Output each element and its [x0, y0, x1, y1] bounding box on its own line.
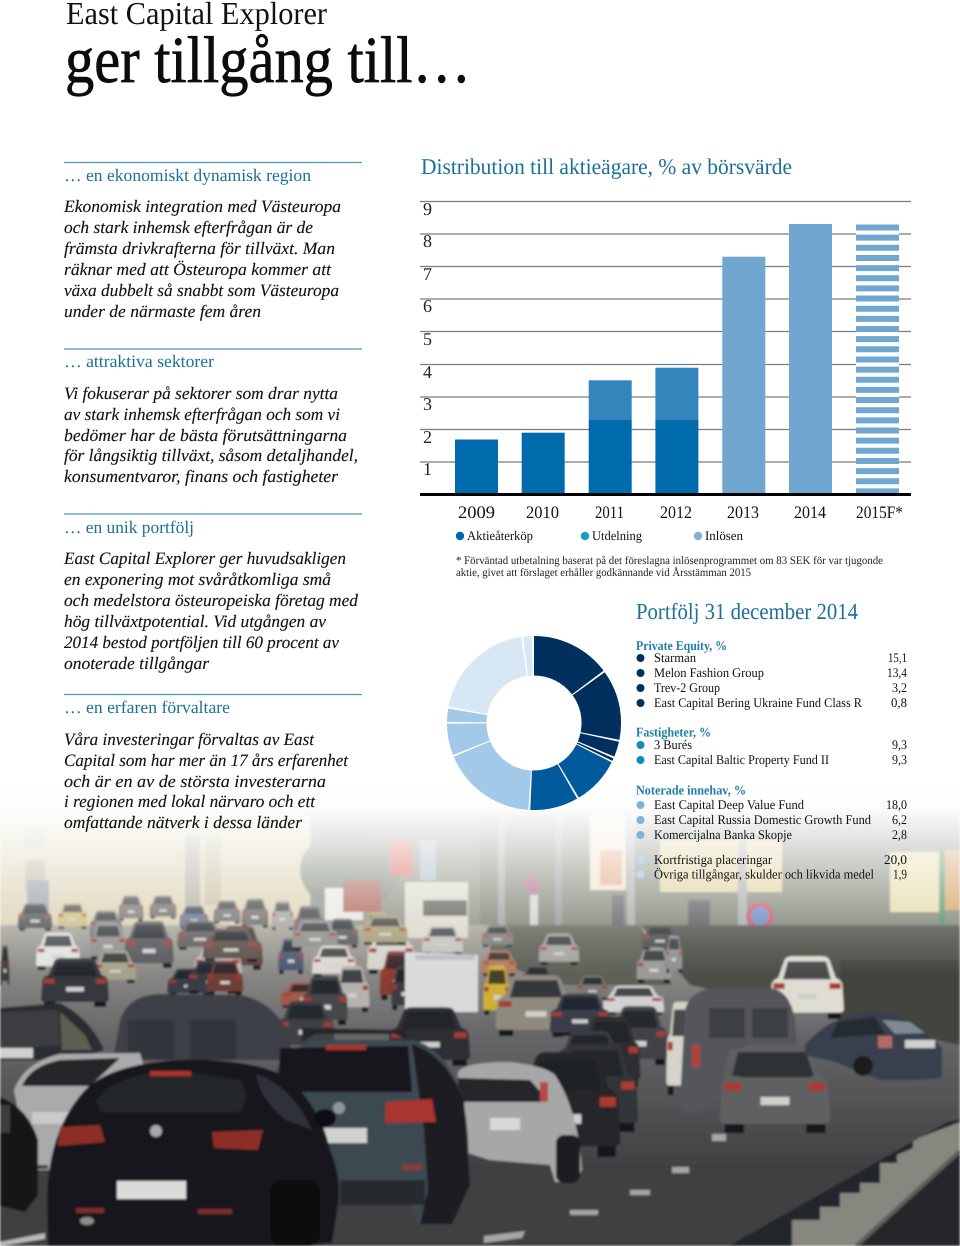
table: private equity: Trev-2 Group — [654, 680, 720, 695]
panel: en ekonomiskt dynamisk region: främsta drivkrafterna för tillväxt. Man — [64, 238, 335, 258]
panel: en ekonomiskt dynamisk region: … en ekonomiskt dynamisk region — [64, 165, 311, 185]
title — [65, 0, 471, 97]
x axis years: 2009 — [458, 502, 495, 522]
table: private equity: Private Equity, % — [636, 638, 727, 653]
panel: en unik portfölj: … en unik portfölj — [64, 517, 194, 537]
legend: distribution: Aktieåterköp — [467, 528, 533, 543]
bar 2009 — [455, 440, 498, 494]
bar 2012 — [655, 368, 698, 495]
legend: distribution: Inlösen — [705, 528, 743, 543]
footnote: * Förväntad utbetalning baserat på det föreslagna inlösenprogrammet om 83 SEK för var tjugonde — [456, 555, 883, 567]
x axis years: 2013 — [727, 502, 759, 522]
panel: en erfaren förvaltare: i regionen med lokal närvaro och ett — [64, 791, 316, 811]
panel: en ekonomiskt dynamisk region: Ekonomisk integration med Västeuropa — [63, 196, 341, 216]
panel: attraktiva sektorer: för långsiktig tillväxt, såsom detaljhandel, — [64, 445, 358, 465]
table: other holdings: Övriga tillgångar, skulder och likvida medel — [654, 866, 874, 882]
panel: en erfaren förvaltare: omfattande nätverk i dessa länder — [64, 812, 302, 832]
bar 2014 — [789, 224, 832, 495]
table: fastigheter — [636, 724, 907, 767]
x axis years: 2015F* — [856, 502, 903, 522]
panel: en erfaren förvaltare: Våra investeringar förvaltas av East — [64, 729, 315, 749]
table: noterade innehav: East Capital Russia Domestic Growth Fund — [654, 812, 871, 827]
legend: distribution — [456, 528, 743, 543]
table: noterade innehav: East Capital Deep Value Fund — [654, 797, 804, 812]
panel: en unik portfölj: 2014 bestod portföljen till 60 procent av — [64, 632, 339, 652]
table: noterade innehav: Komercijalna Banka Skopje — [654, 827, 792, 842]
table: fastigheter: 9,3 — [892, 752, 907, 767]
panel: en erfaren förvaltare: … en erfaren förvaltare — [64, 697, 230, 717]
footnote: aktie, givet att förslaget erhåller godkännande vid Årsstämman 2015 — [456, 566, 751, 579]
table: fastigheter: 9,3 — [892, 737, 907, 752]
panel: en unik portfölj: hög tillväxtpotential. Vid utgången av — [64, 611, 326, 631]
table: private equity: Starman — [654, 650, 696, 665]
x axis years: 2011 — [595, 502, 624, 522]
panel: attraktiva sektorer — [64, 349, 362, 486]
y axis labels: 7 — [423, 264, 432, 284]
donut chart: portfolio — [467, 656, 601, 790]
table: private equity: Melon Fashion Group — [654, 665, 764, 680]
x axis years: 2014 — [794, 502, 826, 522]
heading: distribution chart: Distribution till aktieägare, % av börsvärde — [421, 154, 792, 179]
y axis labels: 3 — [423, 394, 432, 414]
x axis years: 2012 — [660, 502, 692, 522]
y axis labels: 1 — [423, 459, 432, 479]
x axis years: 2010 — [526, 502, 559, 522]
panel: attraktiva sektorer: bedömer har de bästa förutsättningarna — [64, 425, 347, 445]
y axis labels: 8 — [423, 231, 432, 251]
table: other holdings — [636, 852, 907, 882]
panel: en ekonomiskt dynamisk region — [63, 162, 362, 321]
panel: attraktiva sektorer: konsumentvaror, finans och fastigheter — [64, 466, 338, 486]
table: fastigheter: 3 Burés — [654, 737, 692, 752]
legend: distribution: Utdelning — [592, 528, 642, 543]
panel: en unik portfölj: onoterade tillgångar — [64, 653, 209, 673]
panel: attraktiva sektorer: av stark inhemsk efterfrågan och som vi — [64, 404, 340, 424]
title: ger tillgång till… — [65, 24, 471, 97]
footnote — [456, 555, 883, 579]
y axis labels: 2 — [423, 427, 432, 447]
table: other holdings: 20,0 — [884, 852, 907, 867]
panel: en unik portfölj — [63, 514, 362, 673]
panel: en erfaren förvaltare: och är en av de största investerarna — [64, 771, 326, 791]
bar 2015F striped — [856, 224, 899, 494]
y axis labels — [423, 199, 432, 479]
table: other holdings: 1,9 — [893, 866, 907, 882]
table: fastigheter: Fastigheter, % — [636, 724, 711, 740]
bar 2013 — [722, 257, 765, 495]
table: private equity — [636, 638, 907, 710]
panel: attraktiva sektorer: … attraktiva sektorer — [64, 351, 214, 371]
y axis labels: 9 — [423, 199, 432, 219]
table: private equity: 15,1 — [888, 650, 907, 665]
y axis labels: 4 — [423, 362, 432, 382]
table: noterade innehav: 2,8 — [892, 827, 907, 842]
bar chart: distribution — [420, 199, 911, 522]
panel: en erfaren förvaltare: Capital som har mer än 17 års erfarenhet — [64, 750, 349, 770]
panel: en erfaren förvaltare — [64, 694, 362, 832]
table: private equity: 13,4 — [887, 665, 907, 680]
panel: en ekonomiskt dynamisk region: och stark inhemsk efterfrågan är de — [64, 217, 313, 237]
panel: en ekonomiskt dynamisk region: räknar med att Östeuropa kommer att — [64, 259, 332, 279]
table: private equity: 3,2 — [892, 680, 907, 695]
table: other holdings: Kortfristiga placeringar — [654, 852, 773, 867]
bar 2010 — [522, 433, 565, 495]
table: noterade innehav — [636, 782, 907, 842]
panel: en ekonomiskt dynamisk region: växa dubbelt så snabbt som Västeuropa — [64, 280, 339, 300]
heading: portfolio: Portfölj 31 december 2014 — [636, 599, 858, 624]
x axis years — [458, 502, 903, 522]
table: fastigheter: East Capital Baltic Property Fund II — [654, 752, 829, 767]
panel: en ekonomiskt dynamisk region: under de närmaste fem åren — [64, 301, 261, 321]
bar 2011 — [589, 380, 632, 495]
table: noterade innehav: 18,0 — [886, 797, 907, 812]
table: noterade innehav: 6,2 — [892, 812, 907, 827]
axis baseline — [420, 493, 911, 496]
panel: en unik portfölj: och medelstora östeuropeiska företag med — [64, 590, 358, 610]
y axis labels: 6 — [423, 296, 432, 316]
photo: traffic jam in a hazy city — [0, 780, 960, 1246]
panel: en unik portfölj: East Capital Explorer ger huvudsakligen — [63, 548, 346, 568]
table: private equity: East Capital Bering Ukraine Fund Class R — [654, 695, 862, 710]
photo fade to white — [0, 780, 960, 975]
panel: en unik portfölj: en exponering mot svåråtkomliga små — [64, 569, 331, 589]
table: private equity: 0,8 — [891, 695, 907, 710]
y axis labels: 5 — [423, 329, 432, 349]
table: noterade innehav: Noterade innehav, % — [636, 782, 746, 798]
panel: attraktiva sektorer: Vi fokuserar på sektorer som drar nytta — [64, 383, 338, 403]
